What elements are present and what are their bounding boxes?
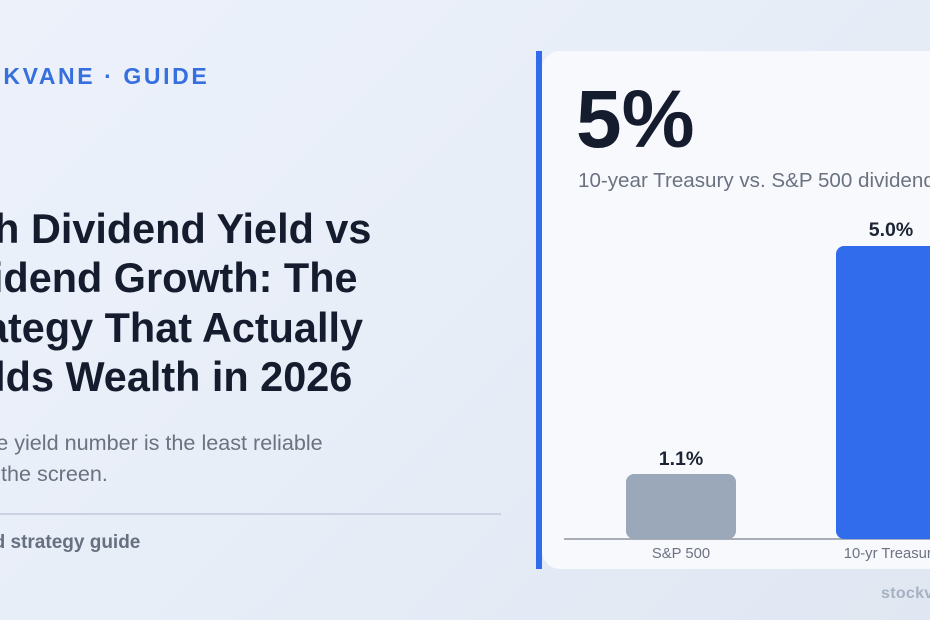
subtitle [0,430,323,486]
value: 10-yr Treasury: 5.0% [869,219,913,241]
divider [0,513,501,515]
card background [542,51,930,569]
panel: yield comparison [536,51,930,569]
value: S&P 500: 1.1% [659,448,703,470]
bar: S&P 500 [626,474,736,539]
big stat: 5% [576,74,695,165]
axis line [564,538,930,540]
bar: 10-yr Treasury [836,246,930,539]
title [0,206,371,400]
bar chart [564,219,930,562]
label: S&P 500: S&P 500 [652,546,710,562]
accent bar [536,51,542,569]
